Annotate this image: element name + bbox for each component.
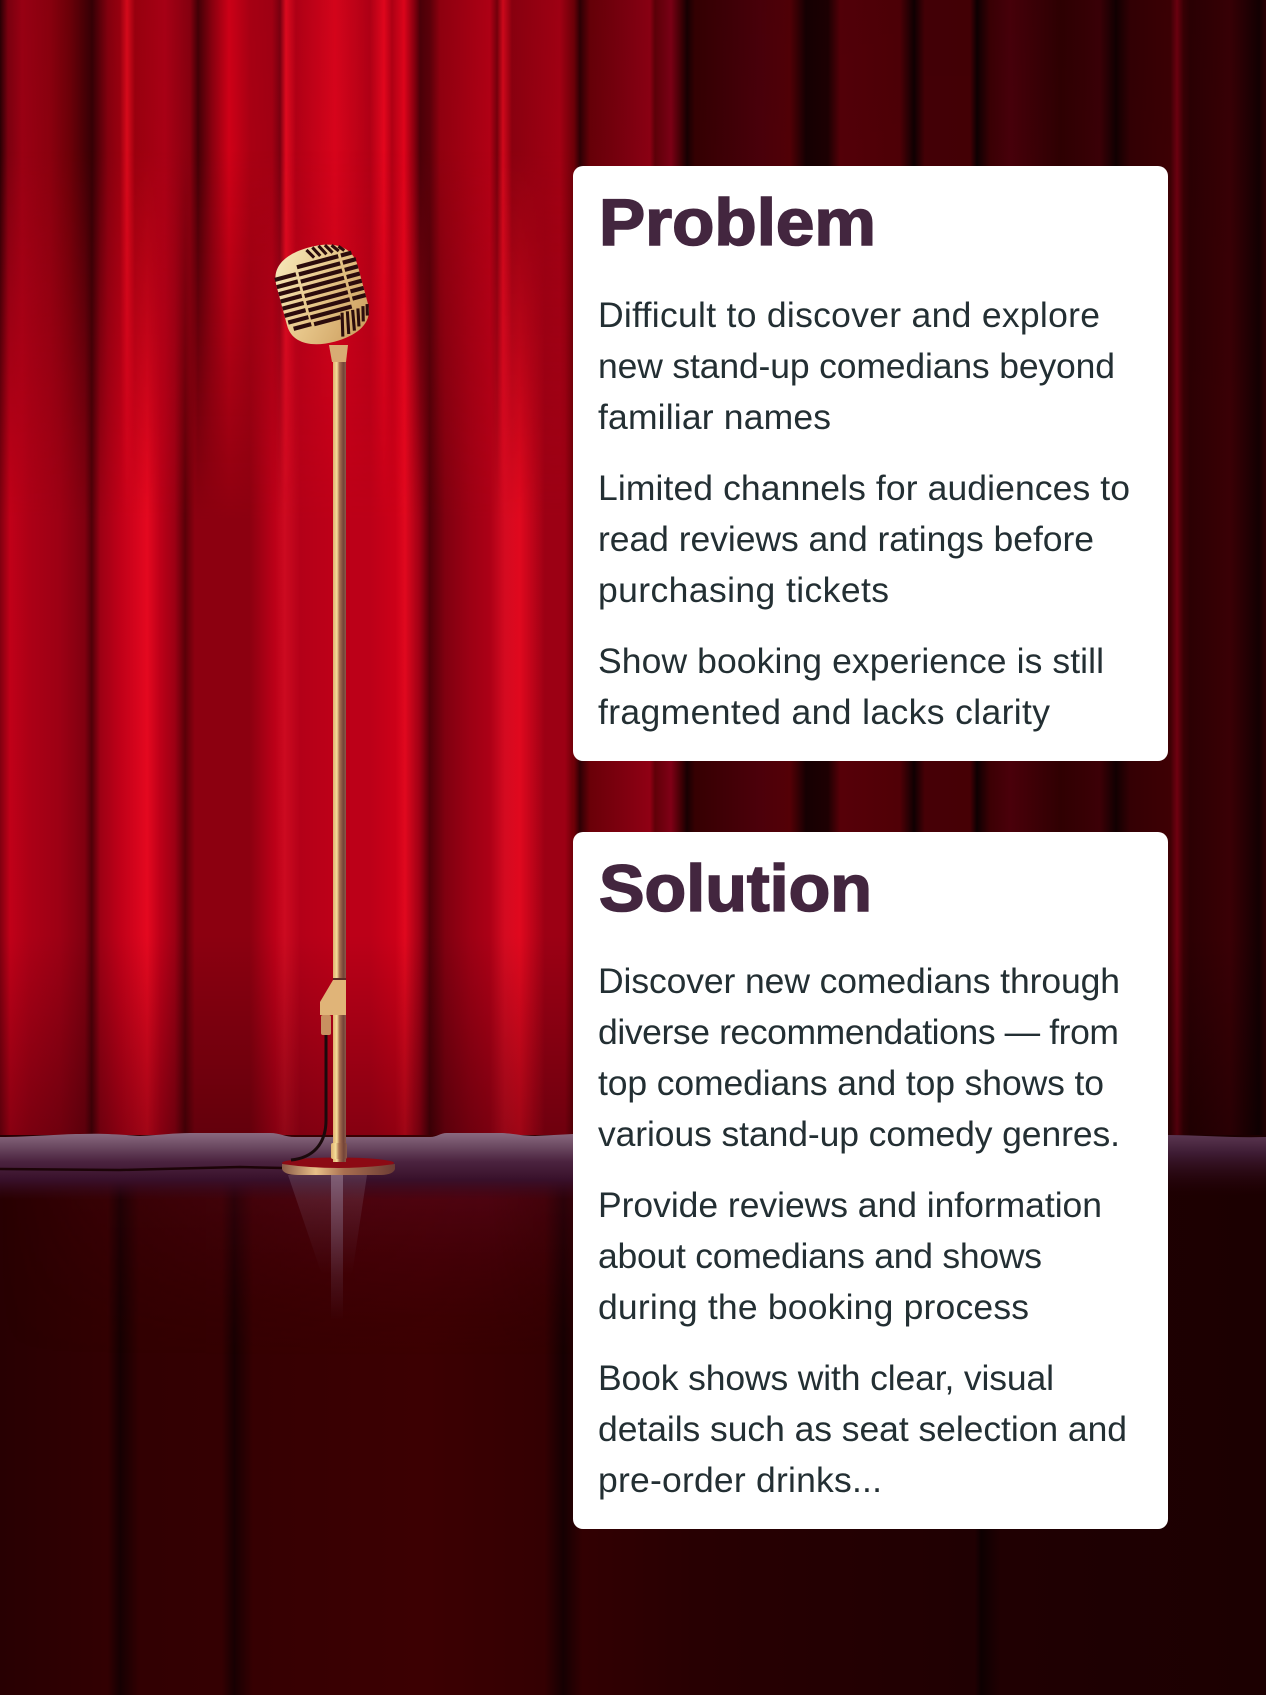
text block: problem point 1: familiar names [598,397,831,437]
text block: solution point 1: top comedians and top shows to [598,1063,1104,1103]
mic collar [329,345,348,362]
stage floor [0,1133,1266,1695]
text block: solution point 1: various stand-up comedy genres. [598,1114,1120,1154]
text block: solution point 1: Discover new comedians through [598,961,1120,1001]
text block: solution point 1: diverse recommendations — from [598,1012,1119,1052]
text block: solution point 3: Book shows with clear, visual [598,1358,1054,1398]
text block: solution point 2: Provide reviews and information [598,1185,1102,1225]
heading: Solution: Solution [599,851,872,925]
floor reflection [288,1175,367,1320]
height clamp [320,980,346,1015]
panel: problem [573,166,1168,761]
curtain background [0,0,1266,1140]
text block: solution point 2 [598,1185,1102,1327]
stand cable [291,1035,326,1160]
text block: problem point 2: purchasing tickets [598,570,889,610]
text block: solution point 2: about comedians and shows [598,1236,1042,1276]
text block: problem point 2: read reviews and ratings before [598,519,1094,559]
text block: solution point 3 [598,1358,1127,1500]
text block: solution point 1 [598,961,1120,1154]
text block: problem point 1 [598,295,1115,437]
text block: problem point 3: fragmented and lacks clarity [598,692,1050,732]
microphone stand [0,345,395,1320]
cable connector [321,1015,331,1035]
text block: problem point 2 [598,468,1130,610]
stand pole [331,358,347,1162]
heading: Problem: Problem [599,185,876,259]
panel: solution [573,832,1168,1529]
text block: problem point 2: Limited channels for audiences to [598,468,1130,508]
text block: solution point 3: details such as seat selection and [598,1409,1127,1449]
icon: microphone head [269,236,375,352]
text block: problem point 1: Difficult to discover and explore [598,295,1100,335]
text block: solution point 2: during the booking process [598,1287,1029,1327]
stand base [282,1158,395,1175]
text block: problem point 1: new stand-up comedians beyond [598,346,1115,386]
text block: solution point 3: pre-order drinks... [598,1460,882,1500]
text block: problem point 3 [598,641,1104,732]
text block: problem point 3: Show booking experience is still [598,641,1104,681]
floor cable [0,1167,283,1170]
